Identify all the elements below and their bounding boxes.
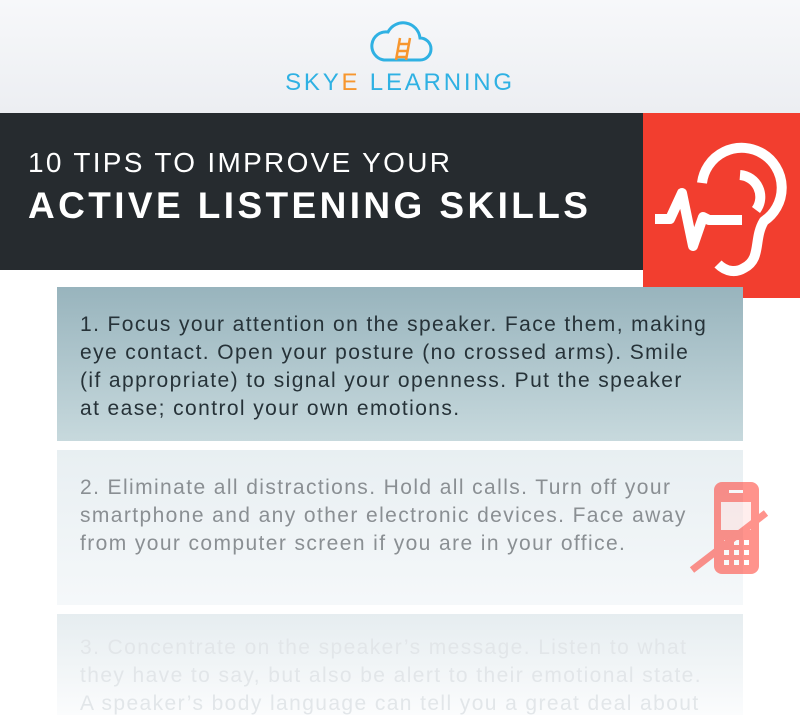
text: tip 3 <box>80 636 702 715</box>
icon: cloud with ladder <box>370 21 432 62</box>
text: tip 3: they have to say, but also be alert to their emotional state. <box>80 664 702 687</box>
text: tip 1: eye contact. Open your posture (no crossed arms). Smile <box>80 341 689 364</box>
text: tip 2: from your computer screen if you are in your office. <box>80 532 626 555</box>
title: 10 TIPS TO IMPROVE YOUR <box>28 147 452 178</box>
panel: tip 2 <box>57 450 743 605</box>
text: tip 2: smartphone and any other electronic devices. Face away <box>80 504 687 527</box>
text: tip 2 <box>80 476 687 555</box>
panel: tip 1 <box>57 287 743 441</box>
text: tip 1: 1. Focus your attention on the speaker. Face them, making <box>80 313 707 336</box>
text: tip 3: 3. Concentrate on the speaker’s message. Listen to what <box>80 636 687 659</box>
panel: tip 3 <box>57 614 743 715</box>
title: ACTIVE LISTENING SKILLS <box>28 185 591 226</box>
logo text: SKYE LEARNING <box>285 69 515 96</box>
icon: no phone <box>690 482 768 574</box>
text: tip 2: 2. Eliminate all distractions. Hold all calls. Turn off your <box>80 476 671 499</box>
title <box>28 147 591 226</box>
header background <box>0 0 800 113</box>
icon: ear with pulse <box>643 113 800 298</box>
text: tip 1: (if appropriate) to signal your openness. Put the speaker <box>80 369 683 392</box>
title band <box>0 113 800 270</box>
text: tip 3: A speaker’s body language can tell you a great deal about <box>80 692 700 715</box>
logo <box>285 21 515 96</box>
text: tip 1 <box>80 313 707 420</box>
text: tip 1: at ease; control your own emotions. <box>80 397 461 420</box>
